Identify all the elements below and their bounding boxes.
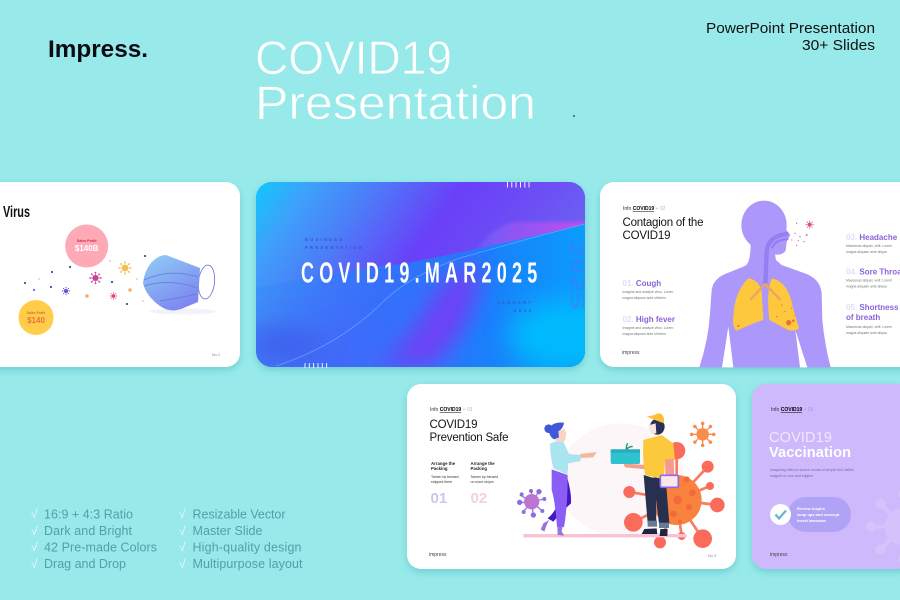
heading: COVID19 [769, 430, 832, 446]
check marks left [31, 507, 38, 571]
item: Headache: Maecenas aliquet, velit. Lorem [846, 244, 892, 248]
bubble: pink sales profit [65, 224, 108, 268]
callout pill: Review inspire [797, 506, 826, 511]
column 02: Packing [470, 466, 487, 471]
feature list left: 16:9 + 4:3 Ratio [44, 508, 133, 522]
faint virus watermark [866, 489, 900, 564]
column 02: Arrange the [470, 461, 495, 466]
item: Shortness of breath: Maecenas aliquet, velit. Lorem [846, 325, 892, 329]
small caption right: JANUARY [497, 300, 531, 305]
icon: face mask [143, 255, 216, 314]
panel: virus slide [0, 182, 240, 367]
slide tag: Info COVID19 + 03 [771, 407, 814, 413]
callout pill: wrap ups and concept [796, 512, 840, 517]
parcel [611, 443, 647, 469]
item: Shortness of breath [846, 303, 899, 335]
woman [541, 423, 597, 536]
bubble: pink sales profit: $140B [75, 244, 99, 253]
heading [769, 430, 851, 461]
title [255, 31, 536, 129]
heading: Prevention Safe [430, 432, 508, 444]
column 02: Tamen by beused [470, 475, 498, 479]
column 01 [430, 461, 459, 507]
item: Shortness of breath: 05. Shortness [846, 303, 899, 312]
small caption left: PRESENTATION [305, 245, 362, 250]
column 02 [470, 461, 498, 507]
small caption right: 2025 [514, 308, 532, 313]
column 01: Arrange the [431, 461, 456, 466]
feature list right: High-quality design [192, 540, 302, 554]
top-right caption: 30+ Slides [802, 37, 875, 54]
bubble: yellow sales profit [18, 300, 54, 335]
title: Presentation [255, 76, 536, 129]
feature list right: Resizable Vector [192, 508, 286, 522]
feature list left: Dark and Bright [44, 524, 133, 538]
panel: cover slide COVID19.MAR2025 [245, 182, 620, 370]
illustration: delivery scene with viruses [517, 413, 725, 548]
small caption left: BUSINESS [305, 237, 342, 242]
column 01: Tamen by beused [431, 475, 459, 479]
logo: Impress.: Impress. [48, 36, 148, 63]
check marks right [179, 507, 186, 571]
item: Sore Throat: Maecenas aliquet, velit. Lorem [846, 278, 892, 282]
item: High fever [622, 315, 675, 336]
check marks right: √ [179, 540, 186, 554]
illustration: human body with lungs [699, 201, 831, 367]
footer logo: impress [770, 552, 788, 558]
ground line [523, 534, 687, 537]
small caption right [497, 300, 532, 313]
heading: Contagion of the [622, 217, 704, 229]
item: Cough: Imagine and analyze virus. Lorem [622, 290, 674, 294]
feature list left: 42 Pre-made Colors [44, 540, 157, 554]
column 02: un more shipm [470, 480, 494, 484]
slide tag: Info COVID19 + 02 [623, 206, 666, 212]
tick marks [305, 182, 529, 368]
feature list left: Drag and Drop [44, 557, 126, 571]
check marks left: √ [31, 507, 38, 521]
heading: COVID19 [622, 230, 670, 242]
callout pill [770, 497, 851, 532]
bubble: pink sales profit: Sales Profit [77, 239, 97, 243]
description: Imagining often in search words of simple text visible [770, 468, 854, 472]
title: COVID19 [255, 31, 452, 84]
heading [622, 217, 704, 242]
feature list right: Master Slide [192, 524, 263, 538]
column 01: Packing [431, 466, 448, 471]
description: magnet ut sure and eligible [770, 474, 813, 478]
panel: prevention slide [407, 384, 736, 569]
slide title: COVID19.MAR2025 [301, 257, 537, 290]
check marks left: √ [31, 524, 38, 538]
heading [430, 419, 508, 444]
gradient waves: 2025 [565, 240, 587, 310]
gradient waves [256, 182, 585, 367]
item: Headache: 03. Headache [846, 233, 898, 242]
check marks right: √ [179, 524, 186, 538]
feature list right: Multipurpose layout [192, 557, 303, 571]
panel: vaccination slide [752, 384, 900, 569]
check marks left: √ [31, 540, 38, 554]
item: Cough: 01. Cough [622, 279, 661, 288]
coral virus [623, 442, 725, 548]
item: Cough [622, 279, 674, 300]
heading: Vaccination [769, 445, 851, 461]
feature list right [179, 507, 303, 571]
item: Sore Throat [846, 268, 900, 288]
footer logo: impress [429, 552, 447, 558]
decorative dot [573, 115, 575, 117]
check marks left: √ [31, 557, 38, 571]
item: High fever: magna aliquam ante ultricies [622, 332, 666, 336]
orange virus [690, 422, 715, 447]
item: Sore Throat: magna aliquam ante aliqua [846, 284, 887, 288]
item: Shortness of breath: magna aliquam ante aliqua [846, 331, 887, 335]
item: Headache: magna aliquam ante aliqua [846, 250, 887, 254]
footer logo: impress [622, 350, 640, 356]
feature list left [31, 507, 157, 571]
check marks right: √ [179, 557, 186, 571]
column 01: 01 [430, 490, 447, 507]
item: High fever: Imagine and analyze virus. Lorem [622, 326, 674, 330]
particles and small viruses [24, 255, 146, 305]
item: Cough: magna aliquam ante ultricies [622, 296, 666, 300]
item: Headache [846, 233, 898, 254]
page number: No.3 [708, 553, 717, 558]
icon: check badge [770, 504, 791, 525]
callout pill: insert lawsman [797, 518, 826, 523]
delivery man [642, 413, 678, 536]
small caption left [305, 237, 362, 250]
heading: Virus: Virus [3, 204, 30, 221]
description [770, 468, 854, 478]
panel: contagion slide [600, 182, 900, 367]
top-right caption [706, 20, 875, 54]
column 01: shipped there [431, 480, 452, 484]
heading: COVID19 [430, 419, 478, 431]
bubble: yellow sales profit: $140 [27, 316, 45, 325]
column 02: 02 [470, 490, 487, 507]
page number: No.2 [212, 352, 221, 357]
check marks right: √ [179, 507, 186, 521]
slide tag: Info COVID19 + 03 [430, 407, 473, 413]
top-right caption: PowerPoint Presentation [706, 20, 875, 37]
purple virus [517, 489, 546, 518]
item: High fever: 02. High fever [622, 315, 675, 324]
bubble: yellow sales profit: Sales Profit [27, 311, 46, 315]
item: Shortness of breath: of breath [846, 313, 880, 322]
